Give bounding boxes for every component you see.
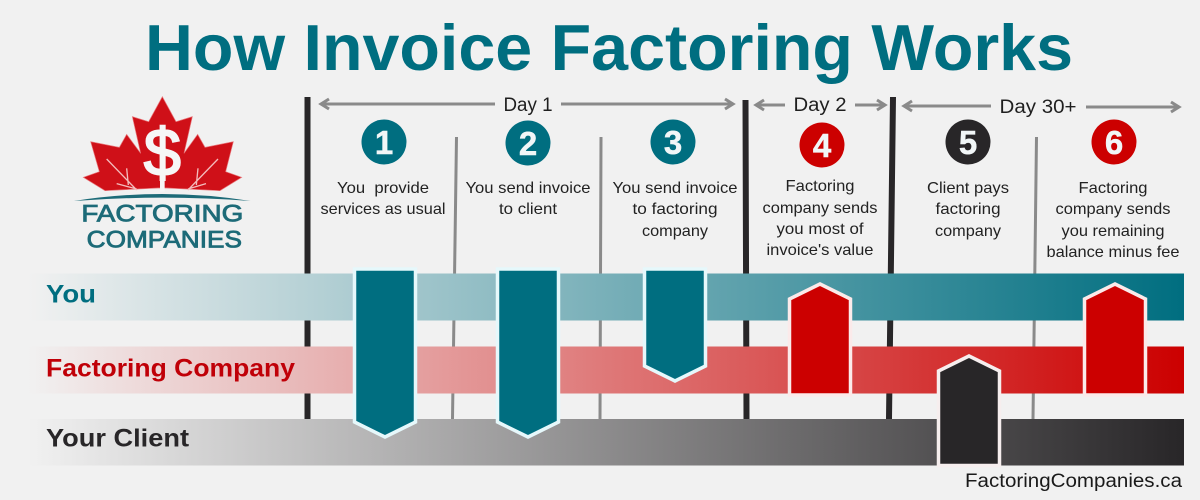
step 6 text: you remaining	[1062, 223, 1164, 240]
step 5 badge	[946, 120, 990, 164]
day 2 span	[756, 95, 885, 116]
step 6 badge	[1092, 120, 1136, 164]
step 4 text: invoice's value	[766, 242, 874, 259]
step 3 text	[612, 180, 738, 240]
logo wordmark: COMPANIES	[87, 227, 242, 254]
footer url: FactoringCompanies.ca	[965, 471, 1182, 492]
step 3 badge: 3	[664, 124, 682, 161]
lane: Your Client: Your Client	[46, 424, 190, 452]
logo swoosh	[74, 194, 251, 201]
step 1 badge: 1	[375, 124, 393, 161]
step 4 text: Factoring	[786, 178, 854, 195]
lane: Factoring Company	[28, 346, 1184, 394]
step 6 text	[1046, 180, 1180, 261]
logo wordmark: FACTORING	[81, 201, 243, 228]
arrow: step 3 you to factoring company	[644, 269, 706, 381]
arrow: step 4 factoring company to you	[790, 284, 850, 395]
day 1 span	[321, 95, 733, 116]
logo wordmark	[81, 201, 243, 254]
arrow: step 6 factoring company to you	[1084, 284, 1146, 395]
title: How Invoice Factoring Works	[145, 11, 1073, 84]
arrow: day 2	[756, 100, 885, 110]
step 4 text	[762, 178, 878, 259]
arrow: step 5 client to factoring company	[938, 356, 1000, 466]
step 3 text: company	[642, 223, 708, 240]
lane: You	[28, 274, 1184, 320]
step 6 text: company sends	[1056, 201, 1170, 218]
lane: You: You	[46, 280, 96, 308]
step 4 badge	[800, 122, 844, 168]
step 1 badge	[362, 120, 406, 164]
step 2 text: to client	[499, 201, 558, 218]
step 4 text: company sends	[762, 200, 878, 217]
step 1 text: services as usual	[320, 201, 446, 218]
icon: maple leaf	[83, 97, 242, 191]
step 5 text: Client pays	[927, 180, 1009, 197]
step 4 badge: 4	[813, 127, 832, 164]
logo: Factoring Companies	[74, 97, 251, 254]
day 30+ span	[904, 97, 1179, 118]
step 2 text: You send invoice	[466, 180, 591, 197]
step 3 text: You send invoice	[612, 180, 738, 197]
icon: dollar sign: $	[144, 117, 181, 191]
timeline dividers	[308, 97, 1036, 419]
step 5 text: factoring	[936, 201, 1000, 218]
step 3 text: to factoring	[632, 201, 718, 218]
step 2 badge	[506, 120, 550, 166]
arrow: step 2 you to client	[498, 269, 558, 437]
arrow: step 1 you to client	[354, 269, 416, 437]
step 4 text: you most of	[776, 221, 864, 238]
lane: Factoring Company: Factoring Company	[46, 354, 295, 382]
lane: Your Client	[28, 419, 1184, 466]
step 3 badge	[650, 120, 696, 164]
step 2 text	[466, 180, 591, 218]
day 2 span: Day 2	[794, 95, 846, 116]
step 6 text: balance minus fee	[1046, 244, 1180, 261]
step 2 badge: 2	[519, 125, 537, 162]
step 1 text: You provide	[337, 180, 429, 197]
step 5 badge: 5	[959, 124, 977, 161]
arrow: day 1	[321, 99, 733, 109]
step 6 badge: 6	[1105, 124, 1123, 161]
arrow: day 30+	[904, 101, 1179, 112]
step 5 text: company	[935, 223, 1001, 240]
step 6 text: Factoring	[1078, 180, 1148, 197]
step 1 text	[320, 180, 446, 218]
day 30+ span: Day 30+	[1000, 97, 1076, 118]
day 1 span: Day 1	[504, 95, 552, 116]
icon: leaf veins	[107, 159, 218, 190]
step 5 text	[927, 180, 1009, 240]
